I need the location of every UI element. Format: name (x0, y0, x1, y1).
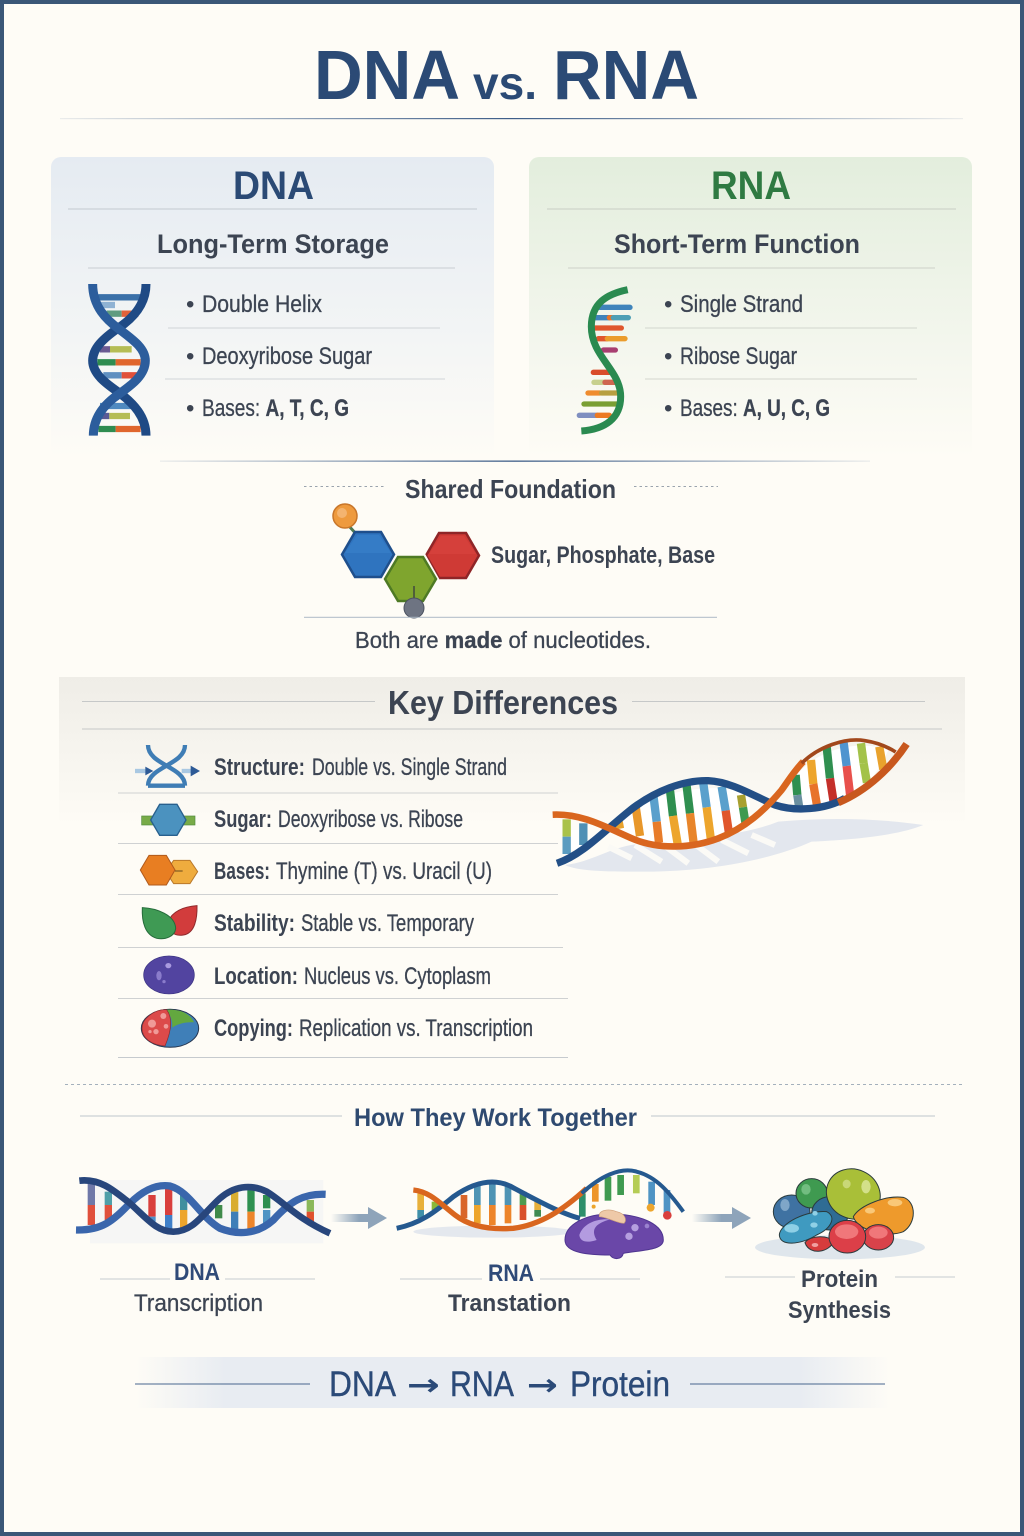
summary banner: DNA to RNA to protein: DNA (329, 1365, 397, 1404)
panel: key differences (59, 677, 965, 1058)
DNA bullet list: • (186, 291, 194, 318)
panel: DNA (51, 157, 494, 460)
step label: protein synthesis: Protein (801, 1266, 878, 1293)
summary banner: DNA to RNA to protein: Protein (570, 1365, 670, 1404)
RNA panel subheading: Short-Term Function (614, 229, 860, 259)
icon: structure (135, 745, 200, 786)
icon: bases (140, 855, 198, 885)
row: sugar: Deoxyribose vs. Ribose (278, 806, 463, 833)
icon: stability (142, 906, 197, 939)
step label: DNA transcription: Transcription (134, 1290, 263, 1317)
step label: RNA translation (400, 1260, 640, 1317)
summary banner: DNA to RNA to protein: → (527, 1368, 558, 1403)
DNA bullet list: • (186, 343, 194, 370)
DNA bullet list (165, 291, 445, 422)
DNA panel heading: DNA (233, 164, 314, 208)
row: bases: Bases: (214, 858, 270, 885)
RNA bullet list: Bases: A, U, C, G (680, 395, 830, 422)
row: bases: Thymine (T) vs. Uracil (U) (276, 858, 492, 885)
summary banner: DNA to RNA to protein: RNA (450, 1365, 515, 1404)
step label: DNA transcription (100, 1259, 315, 1317)
row: stability: Stability: (214, 910, 295, 937)
row: copying: Replication vs. Transcription (299, 1015, 533, 1042)
row: sugar: Sugar: (214, 806, 272, 833)
row: location (144, 956, 491, 994)
step label: protein synthesis: Synthesis (788, 1297, 891, 1324)
row: copying (141, 1009, 533, 1047)
title (314, 36, 699, 114)
DNA panel subheading: Long-Term Storage (157, 229, 389, 259)
RNA bullet list: Ribose Sugar (680, 343, 797, 370)
illustration: DNA transcription (76, 1180, 330, 1243)
RNA bullet list: Single Strand (680, 291, 803, 318)
key differences heading: Key Differences (388, 684, 618, 721)
RNA panel heading: RNA (711, 164, 791, 208)
row: bases (140, 855, 492, 885)
panel: RNA (529, 157, 972, 460)
arrow: to protein (692, 1207, 751, 1229)
icon: DNA double helix (93, 284, 146, 436)
illustration: protein cluster (755, 1160, 925, 1259)
RNA bullet list: • (664, 291, 672, 318)
row: structure: Structure: (214, 754, 305, 781)
section divider (65, 1084, 963, 1086)
icon: sugar (142, 804, 195, 835)
title: vs. (473, 57, 537, 109)
step label: DNA transcription: DNA (174, 1259, 220, 1286)
heading: shared foundation: Shared Foundation (405, 474, 616, 504)
summary banner: DNA to RNA to protein (135, 1357, 890, 1408)
step label: RNA translation: RNA (488, 1260, 534, 1287)
step label: RNA translation: Transtation (448, 1290, 571, 1317)
row: location: Location: (214, 963, 298, 990)
row: copying: Copying: (214, 1015, 293, 1042)
RNA bullet list: • (664, 343, 672, 370)
heading: how they work together: How They Work Together (354, 1104, 637, 1132)
row: structure (135, 745, 507, 786)
label: sugar phosphate base: Sugar, Phosphate, Base (491, 542, 715, 569)
icon: copying (141, 1009, 199, 1047)
RNA bullet list: • (664, 395, 672, 422)
row: stability: Stable vs. Temporary (301, 910, 474, 937)
DNA bullet list: Bases: A, T, C, G (202, 395, 349, 422)
icon: RNA single strand (579, 290, 630, 431)
arrow: to translation (331, 1207, 387, 1229)
row: location: Nucleus vs. Cytoplasm (304, 963, 491, 990)
title: RNA (553, 36, 699, 114)
icon: location (144, 956, 194, 994)
summary banner: DNA to RNA to protein: → (407, 1368, 440, 1403)
row: structure: Double vs. Single Strand (312, 754, 507, 781)
step label: protein synthesis (725, 1266, 955, 1324)
DNA bullet list: • (186, 395, 194, 422)
RNA bullet list (645, 291, 917, 422)
illustration: large DNA helix (553, 740, 923, 872)
row: sugar (142, 804, 463, 835)
DNA bullet list: Double Helix (202, 291, 322, 318)
row: stability (142, 906, 474, 939)
DNA bullet list: Deoxyribose Sugar (202, 343, 372, 370)
illustration: RNA translation (397, 1170, 683, 1259)
caption: nucleotides: Both are made of nucleotides. (355, 627, 651, 653)
icon: nucleotide molecule (333, 504, 479, 618)
title: DNA (314, 36, 460, 114)
